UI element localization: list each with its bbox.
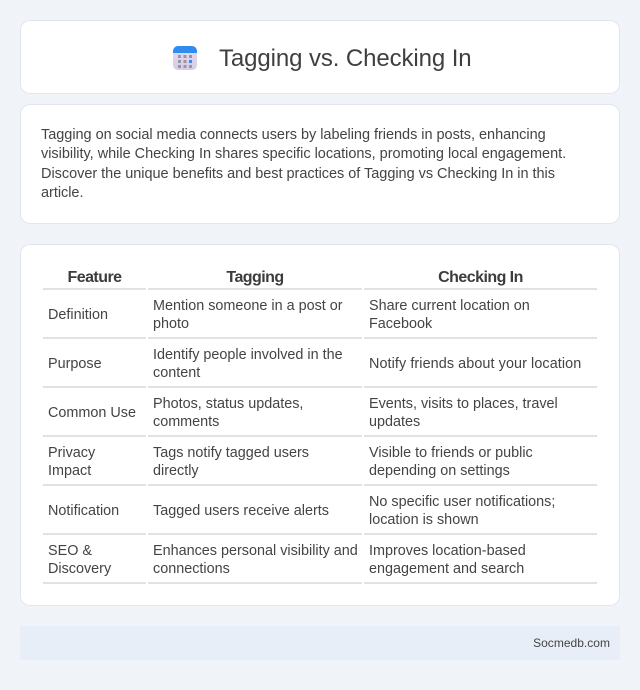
panel: intro text <box>20 104 620 224</box>
row: Notification: No specific user notifications; <box>369 494 555 510</box>
footer credit: Socmedb.com <box>533 636 610 650</box>
row: SEO & Discovery: Enhances personal visibility and <box>153 543 358 559</box>
footer bar <box>20 626 620 660</box>
table header row <box>68 269 523 286</box>
row: Definition: photo <box>153 316 189 332</box>
table header row: Feature <box>68 269 121 286</box>
table header row: Checking In <box>438 269 523 286</box>
row: SEO & Discovery: connections <box>153 561 230 577</box>
row: Purpose: Purpose <box>48 356 102 372</box>
intro paragraph <box>41 127 566 201</box>
row: SEO & Discovery: engagement and search <box>369 561 524 577</box>
row: Purpose: Identify people involved in the <box>153 347 343 363</box>
title: Tagging vs. Checking In <box>219 45 472 72</box>
row: Common Use: comments <box>153 414 219 430</box>
row: Purpose: Notify friends about your location <box>369 356 581 372</box>
intro paragraph: visibility, while Checking In shares specific locations, promoting local engagement. <box>41 146 566 162</box>
row: SEO & Discovery: Improves location-based <box>369 543 526 559</box>
panel: title card <box>20 20 620 94</box>
row: Privacy Impact: Impact <box>48 463 91 479</box>
row: Privacy Impact: depending on settings <box>369 463 510 479</box>
row: Definition <box>48 298 530 332</box>
intro paragraph: Discover the unique benefits and best practices of Tagging vs Checking In in this <box>41 166 555 182</box>
row: Common Use: Photos, status updates, <box>153 396 303 412</box>
row: Common Use: Common Use <box>48 405 136 421</box>
intro paragraph: Tagging on social media connects users by labeling friends in posts, enhancing <box>41 127 546 143</box>
row: SEO & Discovery: SEO & <box>48 543 92 559</box>
row: Definition: Facebook <box>369 316 432 332</box>
row: Common Use <box>48 396 558 430</box>
row: Privacy Impact: Visible to friends or public <box>369 445 533 461</box>
table header row: Tagging <box>226 269 284 286</box>
row: Privacy Impact <box>48 445 533 479</box>
row: Privacy Impact: Privacy <box>48 445 95 461</box>
row: SEO & Discovery: Discovery <box>48 561 111 577</box>
row: SEO & Discovery <box>48 543 526 577</box>
row: Privacy Impact: directly <box>153 463 199 479</box>
row: Definition: Share current location on <box>369 298 530 314</box>
intro paragraph: article. <box>41 185 83 201</box>
row: Definition: Mention someone in a post or <box>153 298 343 314</box>
panel: comparison table <box>20 244 620 606</box>
row: Notification: Tagged users receive alerts <box>153 503 329 519</box>
row: Notification <box>48 494 555 528</box>
row: Privacy Impact: Tags notify tagged users <box>153 445 309 461</box>
row: Definition: Definition <box>48 307 108 323</box>
row: Common Use: Events, visits to places, travel <box>369 396 558 412</box>
row: Purpose <box>48 347 581 381</box>
row: Notification: Notification <box>48 503 119 519</box>
row: Common Use: updates <box>369 414 420 430</box>
row: Purpose: content <box>153 365 200 381</box>
icon: calendar <box>173 46 197 70</box>
row: Notification: location is shown <box>369 512 479 528</box>
